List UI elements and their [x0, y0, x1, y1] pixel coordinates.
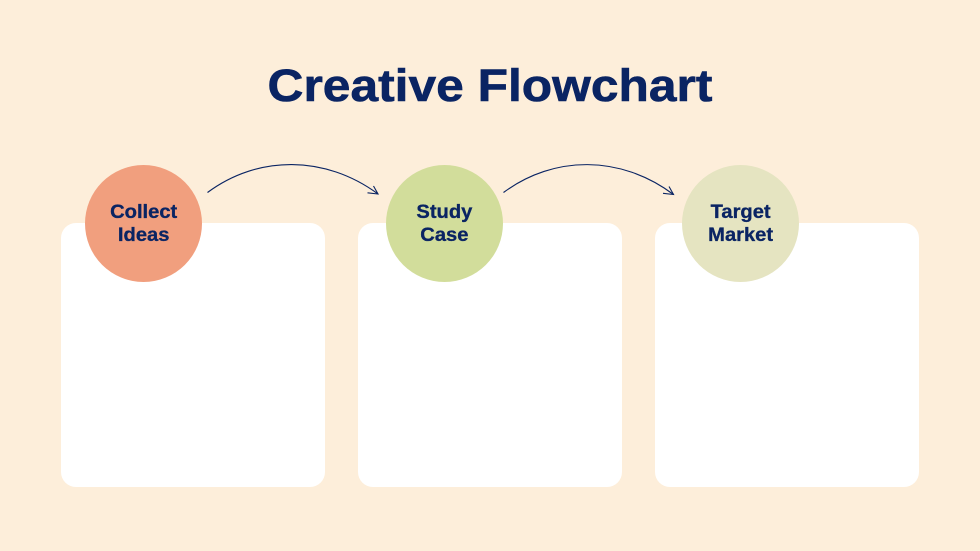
- panel: study case card: [358, 223, 622, 487]
- circle: target market: [682, 165, 799, 282]
- circle: target market: Target: [710, 202, 771, 223]
- arrow: collect ideas to study case: [208, 165, 378, 194]
- circle: collect ideas: [85, 165, 202, 282]
- circle: collect ideas: Collect: [110, 202, 177, 223]
- panel: target market card: [655, 223, 919, 487]
- arrow: study case to target market: [504, 165, 674, 194]
- circle: target market: Market: [708, 225, 773, 246]
- circle: collect ideas: Ideas: [118, 225, 169, 246]
- circle: study case: Case: [420, 225, 469, 246]
- title: Creative Flowchart: [268, 60, 712, 111]
- circle: study case: Study: [417, 202, 472, 223]
- panel: collect ideas card: [61, 223, 325, 487]
- circle: study case: [386, 165, 503, 282]
